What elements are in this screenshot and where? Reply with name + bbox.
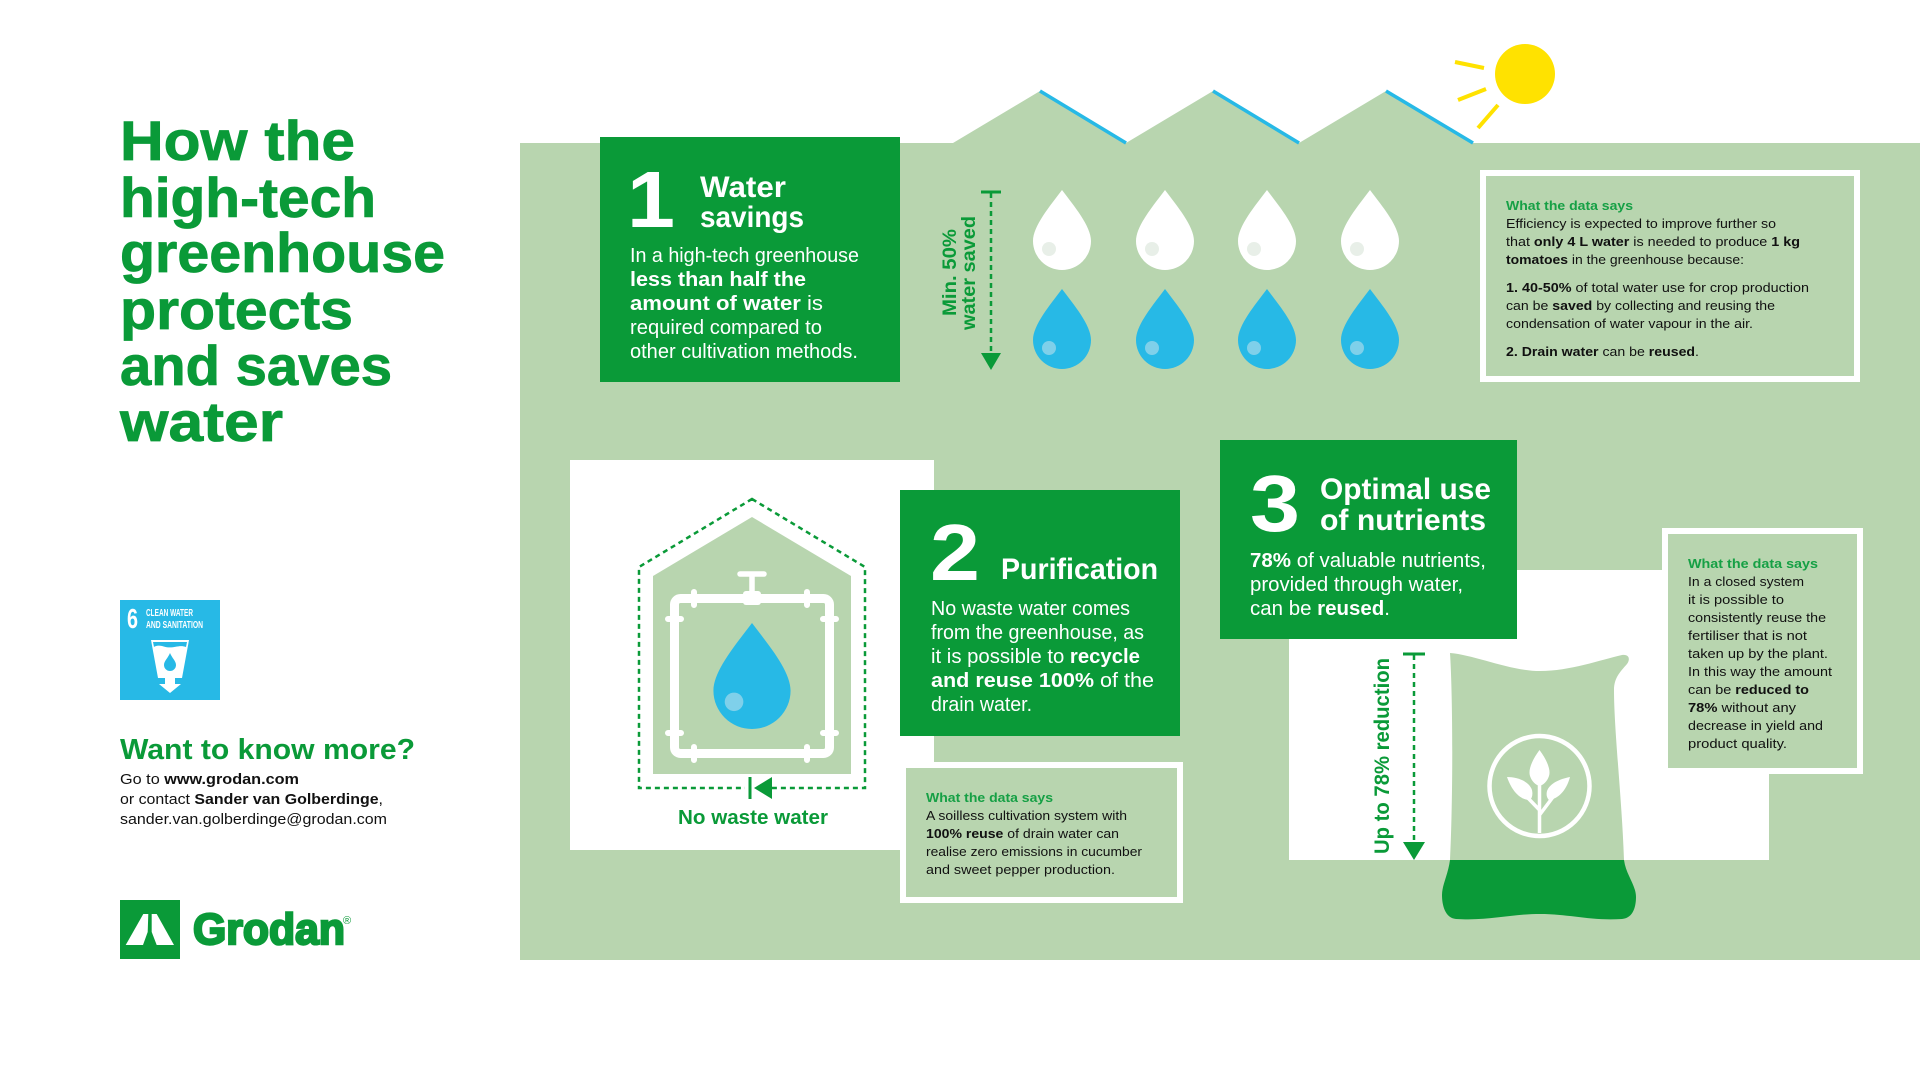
title: high-tech [120,166,376,229]
text: water savings body: amount of water is [630,293,823,315]
text: purification body: drain water. [931,694,1032,716]
text: water savings body: required compared to [630,317,822,339]
callout: what the data says, water savings: condensation of water vapour in the air. [1506,316,1753,331]
step number 2: 2 [930,508,980,597]
icon: fertiliser bag [1442,653,1636,919]
title: water [119,390,283,453]
contact text [120,771,387,828]
text: water savings body [630,245,859,363]
arrow: min 50% water saved [940,192,1001,370]
heading: optimal use of nutrients [1320,473,1491,537]
icon: SDG 6 clean water and sanitation badge: 6 [127,603,138,634]
panel: step 3 optimal use of nutrients [1220,440,1517,639]
callout: what the data says, purification: 100% reuse of drain water can [926,826,1119,841]
step number 3: 3 [1250,459,1300,548]
step number 1: 1 [627,155,675,244]
callout: what the data says, purification: realise zero emissions in cucumber [926,844,1143,859]
callout: what the data says, nutrients: 78% without any [1688,700,1797,715]
logo: Grodan: Grodan [193,905,345,954]
panel: step 2 purification [900,490,1180,736]
heading: want to know more: Want to know more? [120,734,415,766]
contact text: sander.van.golberdinge@grodan.com [120,811,387,828]
heading: purification: Purification [1001,553,1158,586]
icon: blue water drops [1033,289,1399,369]
heading: water savings [700,171,804,234]
panel: step 1 water savings [600,137,900,382]
callout: what the data says, purification [903,765,1180,900]
text: purification body [931,598,1154,716]
callout: what the data says, water savings: can be saved by collecting and reusing the [1506,298,1775,313]
text: nutrients body [1250,550,1486,620]
icon: SDG 6 clean water and sanitation badge: AND SANITATION [146,620,203,631]
contact text: or contact Sander van Golberdinge , [120,791,383,808]
text: water savings body: other cultivation methods. [630,341,858,363]
callout: what the data says, purification: What the data says [926,790,1053,805]
callout: what the data says, nutrients: it is possible to [1688,592,1784,607]
label: no waste water: No waste water [678,807,828,829]
callout: what the data says, nutrients: What the data says [1688,556,1818,571]
callout: what the data says, nutrients: In a closed system [1688,574,1804,589]
callout: what the data says, purification: and sweet pepper production. [926,862,1115,877]
callout: what the data says, purification: A soilless cultivation system with [926,808,1127,823]
title [119,109,445,453]
panel: white backdrop for nutrients diagram [1289,570,1769,860]
callout: what the data says, nutrients: decrease in yield and [1688,718,1823,733]
heading: optimal use of nutrients: of nutrients [1320,504,1486,537]
text: purification body: it is possible to recycle [931,646,1140,668]
text: water savings body: In a high-tech greenhouse [630,245,859,267]
text: purification body: from the greenhouse, as [931,622,1144,644]
callout: what the data says, nutrients: can be reduced to [1688,682,1809,697]
callout: what the data says, nutrients: consistently reuse the [1688,610,1826,625]
icon: solar roof panels [1040,91,1473,143]
text: nutrients body: provided through water, [1250,574,1463,596]
heading: water savings: Water [700,171,786,204]
callout: what the data says, nutrients: In this way the amount [1688,664,1832,679]
arrow: up to 78% reduction: Up to 78% reduction [1371,658,1394,854]
contact text: Go to www.grodan.com [120,771,299,788]
title: and saves [120,334,392,397]
icon: water drop [713,623,791,729]
callout: what the data says, water savings: What the data says [1506,198,1633,213]
title: How the [120,109,355,172]
logo: Grodan: ® [343,915,351,927]
callout: what the data says, nutrients: product quality. [1688,736,1787,751]
icon: pipe loop [668,574,836,760]
arrow: min 50% water saved: water saved [959,216,980,331]
text: water savings body: less than half the [630,269,806,291]
title: protects [120,278,353,341]
title: greenhouse [120,221,445,284]
callout: what the data says, water savings: tomatoes in the greenhouse because: [1506,252,1744,267]
heading: water savings: savings [700,201,804,234]
icon: plant in circle [1490,736,1590,836]
text: purification body: and reuse 100% of the [931,670,1154,692]
icon: white water drops [1033,190,1399,270]
icon: greenhouse with closed water loop [639,499,865,829]
callout: what the data says, water savings: 2. Drain water can be reused . [1506,344,1699,359]
text: nutrients body: 78% of valuable nutrients, [1250,550,1486,572]
panel: white backdrop for purification diagram [570,460,934,850]
heading: optimal use of nutrients: Optimal use [1320,473,1491,506]
callout: what the data says, water savings: Efficiency is expected to improve further so [1506,216,1776,231]
icon: SDG 6 clean water and sanitation badge: CLEAN WATER [146,608,194,619]
arrow: no waste water valve [745,777,772,799]
callout: what the data says, water savings: 1. 40-50% of total water use for crop production [1506,280,1809,295]
callout: what the data says, water savings: that only 4 L water is needed to produce 1 kg [1506,234,1800,249]
panel: greenhouse background [520,91,1920,960]
logo: Grodan [120,900,351,959]
callout: what the data says, nutrients [1665,531,1860,771]
callout: what the data says, nutrients: taken up by the plant. [1688,646,1828,661]
text: nutrients body: can be reused. [1250,598,1390,620]
callout: what the data says, nutrients: fertiliser that is not [1688,628,1807,643]
arrow: up to 78% reduction [1371,654,1425,860]
icon: sun [1455,44,1555,128]
callout: what the data says, water savings [1483,173,1857,379]
text: purification body: No waste water comes [931,598,1130,620]
icon: SDG 6 clean water and sanitation badge [120,600,220,700]
arrow: min 50% water saved: Min. 50% [940,229,961,316]
